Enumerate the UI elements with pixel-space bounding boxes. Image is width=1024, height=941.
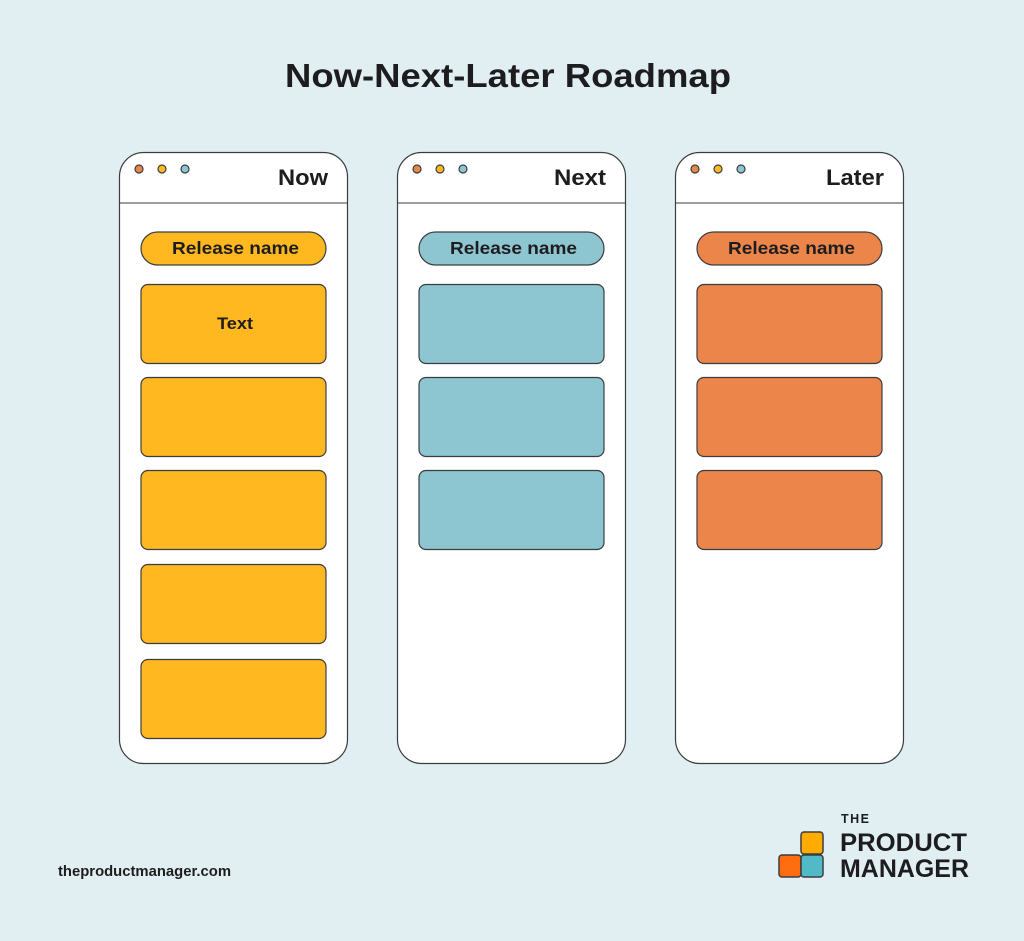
header divider: later [676,202,903,204]
window frame: now [120,152,348,764]
window dots: next [413,165,467,173]
logo icon: blocks [779,832,823,877]
heading: next: Next [554,165,607,190]
logo wordmark [840,812,969,883]
card 1: now [141,284,326,364]
heading: later: Later [826,165,884,190]
panel: later [676,152,904,764]
header divider: next [398,202,625,204]
card 4: now [141,564,326,644]
release pill: later [697,232,882,265]
card 2: later [697,378,882,456]
card 1: later [697,284,882,364]
release pill: later: Release name [728,238,855,258]
card 3: next [419,470,604,550]
logo wordmark: PRODUCT [840,829,967,857]
window frame: later [676,152,904,764]
logo wordmark: THE [841,812,869,826]
website url: theproductmanager.com [58,864,231,880]
release pill: now: Release name [172,238,299,258]
window dots: later [691,165,745,173]
release pill: now [141,232,326,265]
card 5: now [141,660,326,738]
card 1: now: Text [217,314,253,333]
panel: now [120,152,348,764]
release pill: next [419,232,604,265]
title: Now-Next-Later Roadmap [285,57,731,94]
logo [779,812,969,883]
card 2: now [141,378,326,456]
release pill: next: Release name [450,238,577,258]
heading: now: Now [278,165,329,190]
card 2: next [419,378,604,456]
card 1: next [419,284,604,364]
window dots: now [135,165,189,173]
panel: next [398,152,626,764]
window frame: next [398,152,626,764]
header divider: now [120,202,347,204]
logo wordmark: MANAGER [840,855,969,883]
card 3: later [697,470,882,550]
card 3: now [141,470,326,550]
